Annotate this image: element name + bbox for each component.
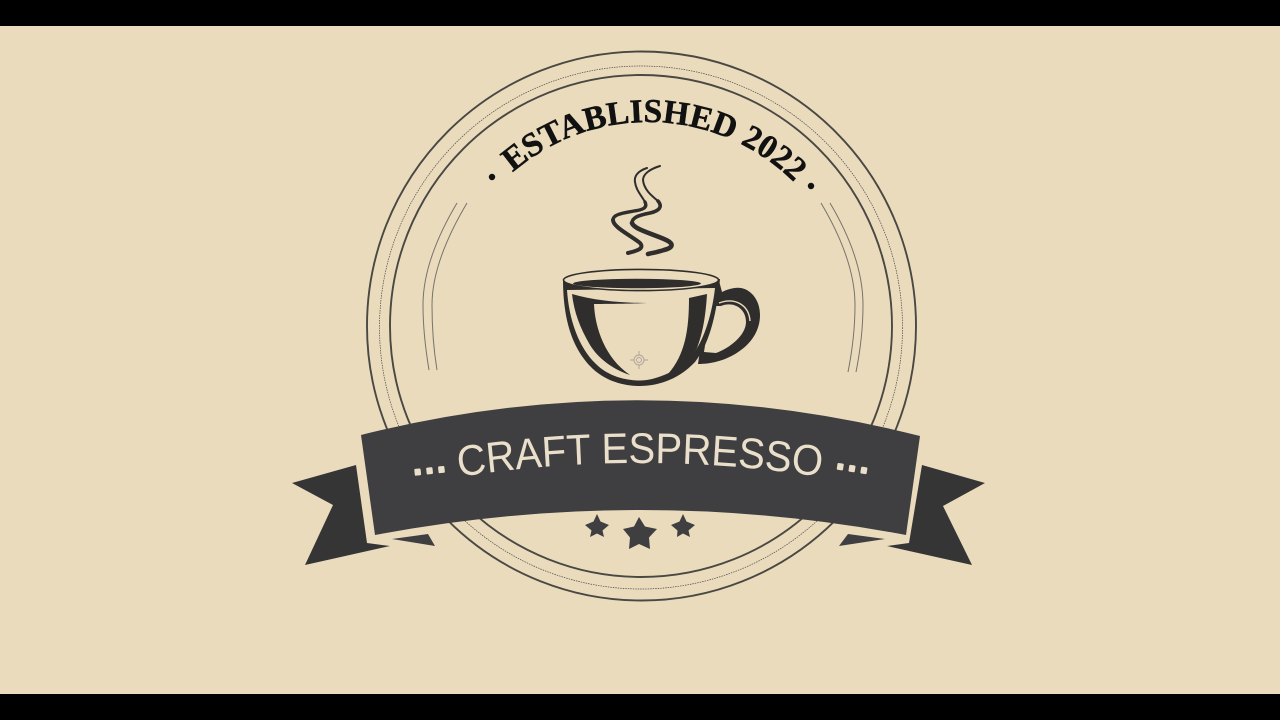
cup shell: [563, 279, 720, 386]
left ribbon tail: [292, 465, 390, 565]
left ribbon ellipsis: ...: [408, 433, 449, 485]
right cup shading: [668, 294, 707, 374]
right ribbon ellipsis: ...: [832, 430, 875, 483]
heading: established 2022: ESTABLISHED 2022: [499, 100, 806, 182]
handle opening: [704, 304, 746, 353]
ribbon banner: [361, 400, 920, 535]
cup rim: [564, 269, 718, 291]
stars: [585, 514, 695, 549]
cup interior: [567, 288, 715, 380]
icon: steam: [613, 166, 672, 254]
coffee surface: [573, 279, 701, 288]
right heading dot: [808, 183, 814, 189]
left ribbon fold: [392, 534, 435, 546]
left cup shading: [572, 294, 647, 375]
left heading dot: [489, 174, 495, 180]
cup handle: [698, 277, 760, 364]
ribbon title: craft espresso: CRAFT ESPRESSO: [458, 433, 822, 476]
icon: coffee cup: [563, 269, 760, 386]
right side arcs: [821, 203, 863, 372]
icon: cursor target mark: [630, 351, 648, 369]
badge circles: [367, 52, 916, 600]
right ribbon fold: [839, 534, 885, 546]
handle highlight: [719, 301, 750, 321]
left side arcs: [423, 203, 467, 370]
right ribbon tail: [887, 465, 985, 565]
